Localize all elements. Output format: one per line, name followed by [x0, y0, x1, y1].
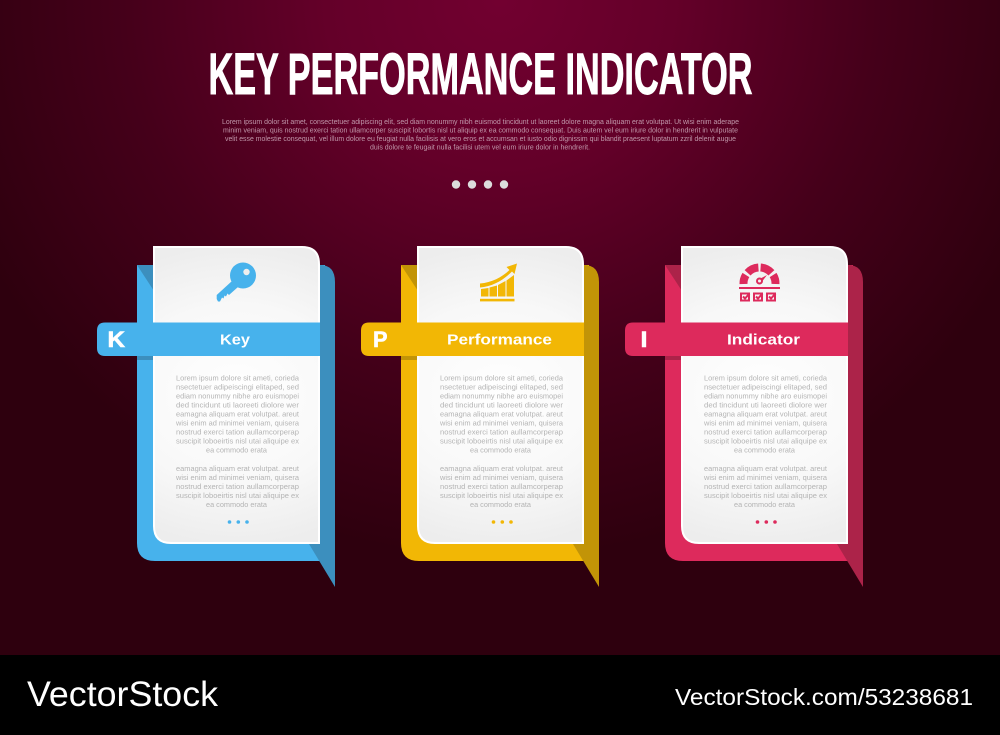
intro text block	[222, 119, 739, 152]
body text: key: nostrud exerci tation aullamcorperap	[176, 482, 299, 491]
body text: performance: nostrud exerci tation aullamcorperap	[440, 428, 563, 436]
body text: key: nostrud exerci tation aullamcorperap	[176, 428, 299, 436]
footer bar	[0, 655, 1000, 735]
body text: indicator: suscipit loboeirtis nisl utai aliquipe ex	[704, 436, 827, 446]
body text: indicator: Lorem ipsum dolore sit ameti, corieda	[704, 374, 828, 382]
body text: indicator: ded tincidunt uti laoreeti diolore wer	[704, 400, 827, 410]
icon: gauge with checkboxes	[739, 268, 780, 300]
body text: performance: ea commodo erata	[470, 500, 532, 509]
body text: performance: ded tincidunt uti laoreeti diolore wer	[440, 400, 563, 410]
body text: key: ea commodo erata	[206, 500, 268, 509]
band: indicator: I	[640, 327, 648, 352]
panel: indicator	[625, 246, 863, 587]
body text: key: wisi enim ad minimei veniam, quisera	[175, 418, 300, 428]
band: key: K	[108, 327, 125, 352]
body text: performance: wisi enim ad minimei veniam, quisera	[439, 418, 564, 428]
body text: indicator: nostrud exerci tation aullamcorperap	[704, 482, 827, 491]
body text: indicator: nostrud exerci tation aullamcorperap	[704, 428, 827, 436]
body text: performance: nostrud exerci tation aullamcorperap	[440, 482, 563, 491]
body text: key: ded tincidunt uti laoreeti diolore wer	[176, 400, 299, 410]
body text: key: nsectetuer adipeiscingi elitaped, sed	[176, 382, 299, 392]
body text: indicator: nsectetuer adipeiscingi elitaped, sed	[704, 382, 827, 392]
band: performance: Performance	[447, 332, 552, 348]
body text: performance: eamagna aliquam erat volutpat. areut	[440, 464, 564, 473]
body text: performance: wisi enim ad minimei veniam, quisera	[439, 473, 564, 482]
band: performance	[361, 322, 584, 356]
body text: performance: Lorem ipsum dolore sit ameti, corieda	[440, 374, 564, 382]
body text: key: ea commodo erata	[206, 446, 268, 454]
body text: performance: eamagna aliquam erat volutpat. areut	[440, 410, 564, 418]
intro text block: Lorem ipsum dolor sit amet, consectetuer adipiscing elit, sed diam nonummy nibh euismod tincidunt ut laoreet dolore magna aliquam erat volutpat. Ut wisi enim aderape	[222, 119, 739, 126]
body text: performance: ea commodo erata	[470, 446, 532, 454]
dots: key	[228, 520, 249, 524]
body text: performance: suscipit loboeirtis nisl utai aliquipe ex	[440, 436, 563, 446]
body text: key: suscipit loboeirtis nisl utai aliquipe ex	[176, 491, 299, 500]
body text: key: ediam nonummy nibhe aro euismopei	[176, 392, 299, 400]
footer logo: VectorStock	[27, 675, 219, 714]
dots: indicator	[756, 520, 777, 524]
body text: indicator: ea commodo erata	[734, 500, 796, 509]
body text: performance	[439, 374, 564, 509]
body text: key	[175, 374, 300, 509]
intro text block: velit esse molestie consequat, vel illum dolore eu feugiat nulla facilisis at vero eros et accumsan et iusto odio dignissim qui blandit praesent luptatum zzril delenit augue	[225, 136, 736, 143]
intro text block: minim veniam, quis nostrud exerci tation ullamcorper suscipit lobortis nisl ut aliquip ex ea commodo consequat. Duis autem vel eum iriure dolor in hendrerit in vulputate	[223, 128, 738, 134]
body text: indicator: eamagna aliquam erat volutpat. areut	[704, 410, 828, 418]
body text: indicator	[703, 374, 828, 509]
body text: performance: ediam nonummy nibhe aro euismopei	[440, 392, 563, 400]
band: key: Key	[220, 332, 251, 348]
body text: key: Lorem ipsum dolore sit ameti, corieda	[176, 374, 300, 382]
icon: growth chart	[480, 264, 517, 301]
band: performance: P	[373, 327, 388, 352]
dots: performance	[492, 520, 513, 524]
body text: indicator: eamagna aliquam erat volutpat. areut	[704, 464, 828, 473]
body text: key: wisi enim ad minimei veniam, quisera	[175, 473, 300, 482]
body text: performance: nsectetuer adipeiscingi elitaped, sed	[440, 382, 563, 392]
body text: indicator: ea commodo erata	[734, 446, 796, 454]
body text: performance: suscipit loboeirtis nisl utai aliquipe ex	[440, 491, 563, 500]
band: indicator: Indicator	[727, 332, 800, 348]
band: indicator	[625, 322, 848, 356]
body text: key: suscipit loboeirtis nisl utai aliquipe ex	[176, 436, 299, 446]
panel: performance	[361, 246, 599, 587]
footer reference: VectorStock.com/53238681	[675, 684, 973, 710]
body text: key: eamagna aliquam erat volutpat. areut	[176, 464, 300, 473]
pagination dots	[452, 180, 508, 189]
intro text block: duis dolore te feugait nulla facilisi utem vel eum iriure dolor in hendrerit.	[370, 144, 590, 152]
body text: indicator: wisi enim ad minimei veniam, quisera	[703, 418, 828, 428]
body text: indicator: ediam nonummy nibhe aro euismopei	[704, 392, 827, 400]
body text: indicator: suscipit loboeirtis nisl utai aliquipe ex	[704, 491, 827, 500]
body text: indicator: wisi enim ad minimei veniam, quisera	[703, 473, 828, 482]
band: key	[97, 322, 320, 356]
icon: key	[217, 262, 256, 302]
panel: key	[97, 246, 335, 587]
body text: key: eamagna aliquam erat volutpat. areut	[176, 410, 300, 418]
